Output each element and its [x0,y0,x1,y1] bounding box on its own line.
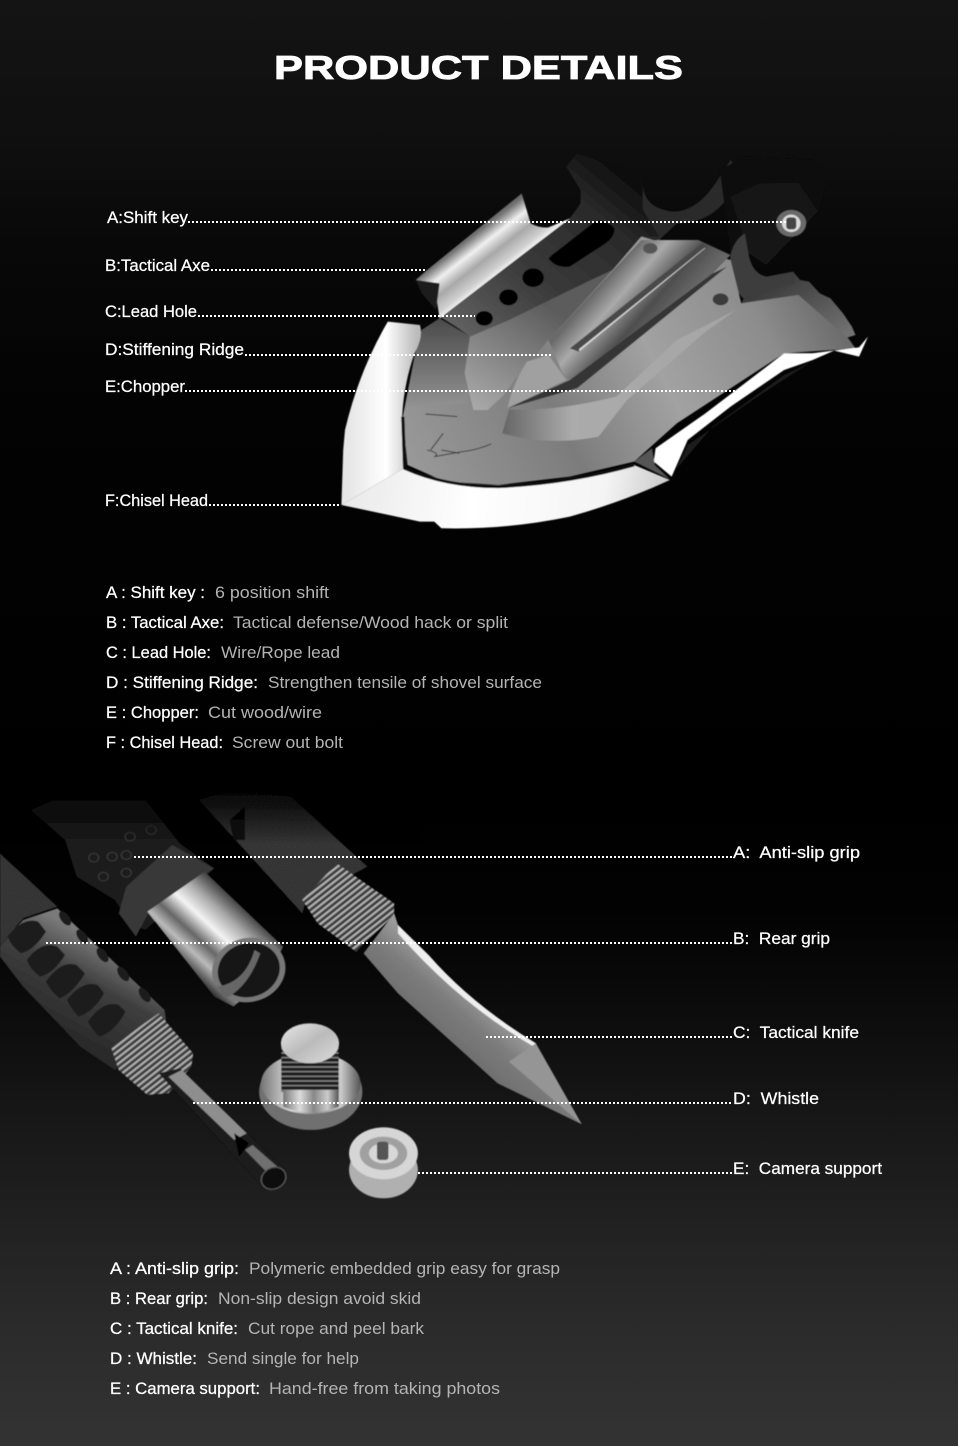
engraved logo [425,414,491,457]
handle part labels: A: Anti-slip grip [733,843,860,862]
central ridge [507,240,731,408]
whistle plug [259,1023,362,1130]
shovel labels: A:Shift key [107,208,188,227]
top fade to black [0,787,421,843]
shovel feature list: D : Stiffening Ridge: [106,673,258,692]
title: PRODUCT DETAILS [274,49,683,86]
chopper right bevel [634,337,868,479]
shovel feature list: F : Chisel Head: [106,733,223,752]
handle feature list: E : Camera support: [110,1379,260,1398]
dotted leaders for shovel [185,222,787,505]
shovel feature list: Screw out bolt [232,733,343,752]
handle feature list: Send single for help [207,1349,359,1368]
handle feature list: D : Whistle: [110,1349,197,1368]
illustration: shovel head [341,153,868,528]
shovel feature list: B : Tactical Axe: [106,613,224,632]
handle feature list: A : Anti-slip grip: [110,1259,239,1278]
handle feature list: Cut rope and peel bark [248,1319,425,1338]
left plate shading [405,318,470,407]
chisel head bottom bevel [341,465,670,528]
base blade plate [403,237,856,485]
shovel feature list: 6 position shift [215,583,329,602]
shovel labels [105,208,244,510]
anti-slip grip with whistle [0,853,291,1194]
handle feature list [110,1259,560,1398]
handle part labels [733,843,882,1178]
handle part labels: C: Tactical knife [733,1023,859,1042]
shovel labels: F:Chisel Head [105,491,208,510]
camera support screw [349,1127,418,1198]
lead holes and slot [476,221,728,326]
handle feature list: Non-slip design avoid skid [218,1289,421,1308]
shovel feature list: Strengthen tensile of shovel surface [268,673,542,692]
shovel labels: D:Stiffening Ridge [105,340,244,359]
shovel feature list: Wire/Rope lead [221,643,340,662]
handle part labels: D: Whistle [733,1089,819,1108]
chisel head left bevel [341,322,421,505]
middle left plate facet [465,270,613,410]
handle feature list: Hand-free from taking photos [269,1379,500,1398]
shovel feature list: Tactical defense/Wood hack or split [233,613,508,632]
handle feature list: C : Tactical knife: [110,1319,238,1338]
shovel labels: C:Lead Hole [105,302,197,321]
shovel feature list [106,583,542,752]
dotted leaders for handle parts [46,857,732,1173]
shovel labels: B:Tactical Axe [105,256,210,275]
tactical axe wing [416,193,570,318]
upper dark plate [440,153,659,337]
shovel feature list: A : Shift key : [106,583,205,602]
handle part labels: E: Camera support [733,1159,882,1178]
tactical knife with knurled handle [199,790,582,1124]
teeth spine [741,272,856,338]
handle feature list: Polymeric embedded grip easy for grasp [249,1259,560,1278]
shovel hook and pivot [641,157,827,301]
lower bowl facet [502,310,736,441]
handle feature list: B : Rear grip: [110,1289,208,1308]
illustration: handle parts [0,787,582,1198]
shovel labels: E:Chopper [105,377,185,396]
dark seam around plate [403,417,634,487]
handle part labels: B: Rear grip [733,929,830,948]
rear grip with sleeve [31,793,301,1015]
shovel feature list: E : Chopper: [106,703,199,722]
shovel feature list: Cut wood/wire [208,703,322,722]
shovel feature list: C : Lead Hole: [106,643,211,662]
